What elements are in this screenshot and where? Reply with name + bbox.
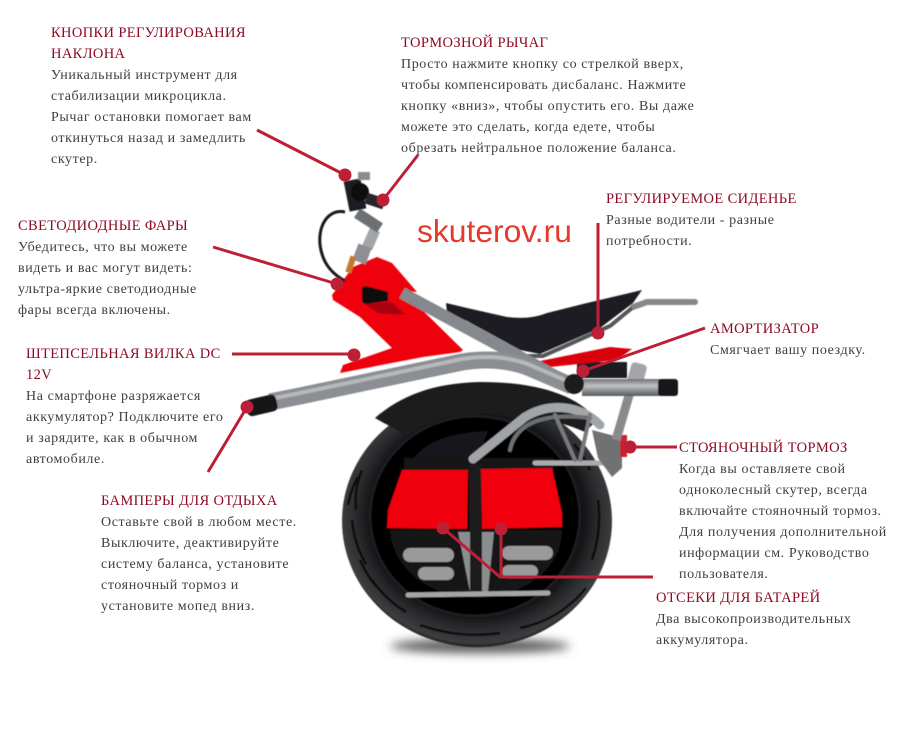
- swing arm: [473, 408, 615, 463]
- handlebars: [320, 172, 384, 281]
- fender: [375, 382, 597, 434]
- text: parking brake: Когда вы оставляете свой: [679, 462, 846, 477]
- bar clamp: [357, 213, 380, 228]
- battery compartment right: [481, 468, 562, 529]
- rear bracket: [592, 430, 622, 477]
- orange tag: [345, 255, 356, 273]
- text: parking brake: Для получения дополнительной: [679, 525, 887, 540]
- callout: DC plug: [232, 348, 360, 362]
- seat: [446, 290, 642, 354]
- tire tread: [348, 444, 599, 635]
- top vent: [414, 431, 488, 462]
- callout: bumpers: [208, 400, 254, 472]
- text: brake lever: Просто нажмите кнопку со стрелкой вверх,: [401, 57, 684, 72]
- text: headlights: СВЕТОДИОДНЫЕ ФАРЫ: [18, 218, 188, 234]
- lower centre fork: [458, 532, 494, 592]
- callout: battery compartments: [436, 522, 653, 577]
- text: brake lever: чтобы компенсировать дисбаланс. Нажмите: [401, 78, 686, 93]
- rear red panel: [535, 347, 632, 367]
- text: brake lever: ТОРМОЗНОЙ РЫЧАГ: [401, 35, 548, 51]
- text: tilt buttons: КНОПКИ РЕГУЛИРОВАНИЯ: [51, 25, 246, 41]
- front bumper: [245, 394, 279, 417]
- callout lines and markers: [208, 130, 705, 577]
- text: DC plug: 12V: [26, 367, 52, 383]
- text: parking brake: СТОЯНОЧНЫЙ ТОРМОЗ: [679, 440, 848, 456]
- text: bumpers: [101, 493, 297, 614]
- lower plate: [390, 530, 562, 598]
- text: parking brake: пользователя.: [679, 567, 768, 582]
- headlight: [362, 286, 388, 304]
- text: brake lever: кнопку «вниз», чтобы опустить его. Вы даже: [401, 99, 694, 114]
- rear suspension: [577, 361, 648, 440]
- text: bumpers: систему баланса, установите: [101, 557, 289, 572]
- red body: [332, 257, 463, 373]
- text: tilt buttons: Уникальный инструмент для: [51, 68, 238, 83]
- callout: tilt buttons: [257, 130, 352, 182]
- text: battery compartments: ОТСЕКИ ДЛЯ БАТАРЕЙ: [656, 590, 820, 606]
- dark body shade: [365, 302, 405, 315]
- callout: shock absorber: [576, 328, 705, 378]
- text: DC plug: автомобиле.: [26, 452, 105, 467]
- text: adjustable seat: Разные водители - разные: [606, 213, 775, 228]
- text: brake lever: [401, 34, 694, 156]
- battery compartment left: [387, 470, 468, 529]
- text: shock absorber: [710, 321, 866, 358]
- text: tilt buttons: НАКЛОНА: [51, 46, 125, 62]
- text: battery compartments: Два высокопроизводительных: [656, 612, 851, 627]
- pivot: [564, 374, 584, 394]
- text: tilt buttons: стабилизации микроцикла.: [51, 89, 227, 104]
- text: bumpers: БАМПЕРЫ ДЛЯ ОТДЫХА: [101, 493, 278, 509]
- callout: seat: [592, 223, 604, 340]
- callout: brake lever: [376, 155, 418, 206]
- centre strut: [469, 465, 481, 540]
- master cylinder: [352, 180, 358, 210]
- wheel: [342, 382, 627, 647]
- fork stem: [367, 230, 375, 248]
- text: headlights: [18, 218, 197, 318]
- rear bumper: [658, 379, 678, 396]
- text: headlights: Убедитесь, что вы можете: [18, 240, 188, 255]
- text: bumpers: стояночный тормоз и: [101, 578, 239, 593]
- bottom bumper bar: [408, 593, 548, 595]
- frame tube diagonal: [402, 293, 572, 385]
- text: brake lever: обрезать нейтральное положение баланса.: [401, 141, 676, 156]
- text: shock absorber: Смягчает вашу поездку.: [710, 343, 866, 358]
- text: adjustable seat: потребности.: [606, 234, 692, 249]
- text: shock absorber: АМОРТИЗАТОР: [710, 321, 819, 337]
- seat rail: [633, 302, 695, 307]
- text: bumpers: Оставьте свой в любом месте.: [101, 515, 297, 530]
- text: battery compartments: [656, 590, 851, 648]
- text: bumpers: Выключите, деактивируйте: [101, 536, 279, 551]
- text: parking brake: [679, 440, 887, 582]
- grip: [366, 198, 384, 204]
- callout: headlights: [213, 247, 344, 290]
- text: parking brake: одноколесный скутер, всегда: [679, 483, 868, 498]
- rear tube: [582, 379, 660, 396]
- text: headlights: фары всегда включены.: [18, 303, 171, 318]
- text: bumpers: установите мопед вниз.: [101, 599, 255, 614]
- rim: [370, 416, 580, 616]
- text: DC plug: [26, 346, 223, 467]
- watermark: skuterov.ru: [417, 213, 572, 249]
- text: adjustable seat: [606, 191, 797, 249]
- text: tilt buttons: [51, 25, 252, 167]
- text: parking brake: включайте стояночный тормоз.: [679, 504, 882, 519]
- callout: parking brake: [624, 440, 677, 454]
- text: headlights: видеть и вас могут видеть:: [18, 261, 192, 276]
- text: tilt buttons: откинуться назад и замедлить: [51, 131, 246, 146]
- text: tilt buttons: скутер.: [51, 152, 98, 167]
- text: DC plug: и зарядите, как в обычном: [26, 431, 198, 446]
- ground shadow: [390, 639, 570, 653]
- text: tilt buttons: Рычаг остановки помогает вам: [51, 110, 252, 125]
- text: headlights: ультра-яркие светодиодные: [18, 282, 197, 297]
- cable: [320, 212, 345, 281]
- text: battery compartments: аккумулятора.: [656, 633, 749, 648]
- upper plate: [404, 458, 554, 472]
- text: DC plug: аккумулятор? Подключите его: [26, 410, 223, 425]
- vents: [403, 546, 553, 580]
- text: parking brake: информации см. Руководство: [679, 546, 869, 561]
- text: DC plug: На смартфоне разряжается: [26, 389, 201, 404]
- text: DC plug: ШТЕПСЕЛЬНАЯ ВИЛКА DC: [26, 346, 221, 362]
- tire: [342, 395, 612, 647]
- parking brake: [620, 435, 627, 457]
- main frame tube: [270, 360, 572, 402]
- text: adjustable seat: РЕГУЛИРУЕМОЕ СИДЕНЬЕ: [606, 191, 797, 207]
- mirror mount: [358, 172, 370, 180]
- text: brake lever: можете это сделать, когда едете, чтобы: [401, 120, 655, 135]
